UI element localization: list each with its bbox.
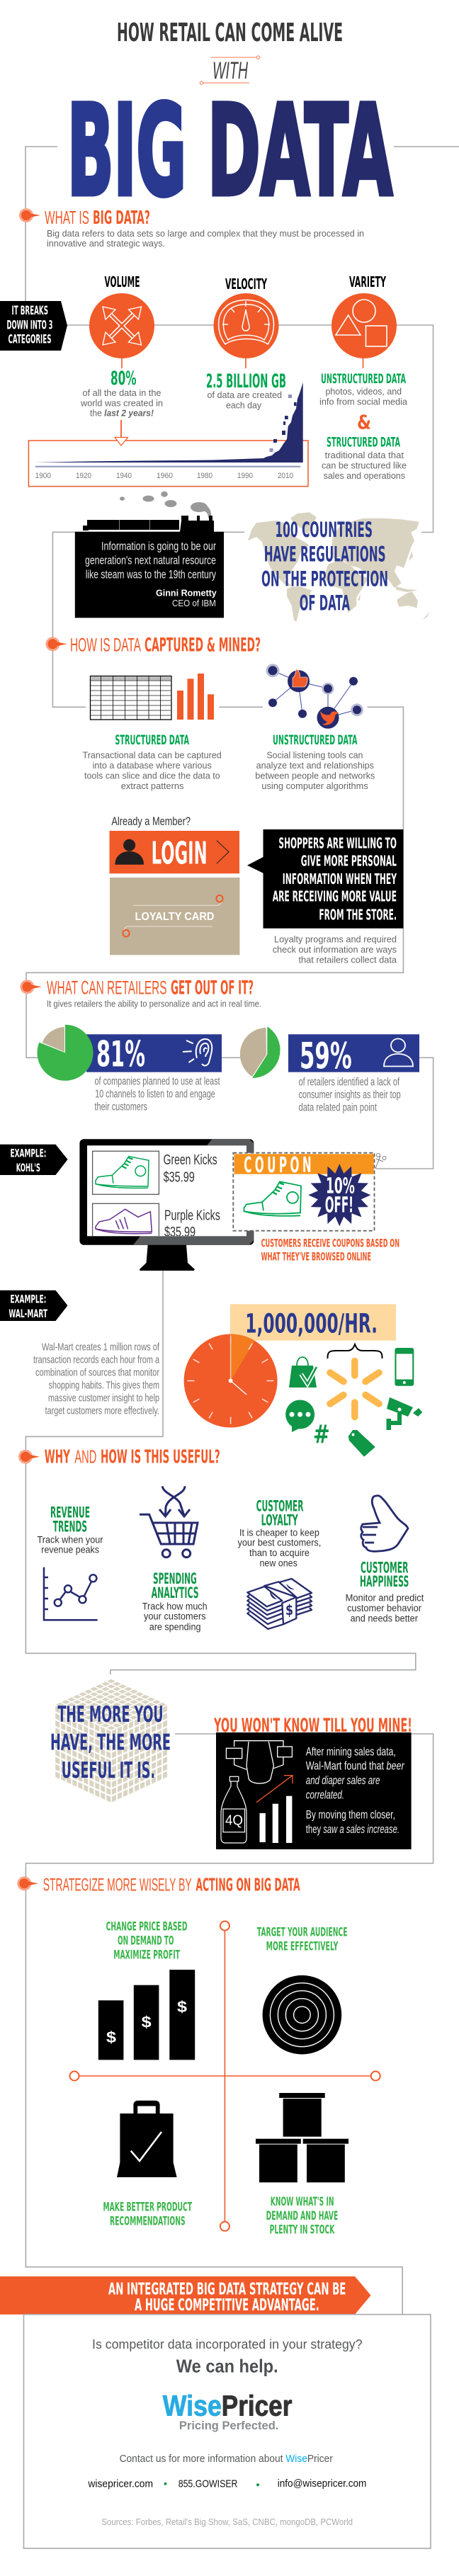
icon: line chart bbox=[44, 1567, 98, 1620]
icon: data cube bbox=[55, 1679, 167, 1803]
quadrant: product recommendations: RECOMMENDATIONS bbox=[110, 2215, 186, 2229]
ampersand: & bbox=[357, 411, 371, 434]
benefit: revenue trends: REVENUE bbox=[50, 1504, 90, 1521]
quadrant cross bbox=[69, 1921, 380, 2231]
icon: social network bbox=[266, 664, 363, 729]
icon: scissors bbox=[375, 1153, 386, 1169]
stat description: the last 2 years! bbox=[90, 408, 154, 419]
structured data definition: can be structured like bbox=[322, 460, 407, 471]
section heading: why and how is this useful: HOW IS THIS USEFUL? bbox=[101, 1447, 220, 1468]
cube callout: THE MORE YOU bbox=[57, 1702, 164, 1727]
icon: walmart spark bbox=[330, 1361, 379, 1417]
stat panel: 59%: data related pain point bbox=[299, 1102, 377, 1114]
tag: example wal-mart: WAL-MART bbox=[8, 1307, 47, 1320]
infographic canvas: ACTING ON BIG DATA bbox=[196, 1874, 300, 1895]
world map callout: OF DATA bbox=[300, 591, 350, 615]
icon: hashtag: # bbox=[313, 1420, 330, 1449]
banner: competitive advantage: A HUGE COMPETITIVE ADVANTAGE. bbox=[135, 2295, 319, 2315]
tag: example kohl's bbox=[0, 1145, 68, 1175]
chart: data growth 1900-2010: 1960 bbox=[157, 472, 173, 480]
icon: speedometer bbox=[219, 300, 273, 344]
product: green kicks bbox=[93, 1151, 217, 1194]
chart: data growth 1900-2010: 1980 bbox=[197, 472, 212, 480]
contact details: 855.GOWISER bbox=[178, 2479, 238, 2490]
quadrant: stock: KNOW WHAT'S IN bbox=[271, 2195, 334, 2209]
monitor with shoes bbox=[79, 1139, 254, 1271]
coupon bbox=[233, 1152, 386, 1231]
panel: beer and diapers: and diaper sales are bbox=[306, 1774, 380, 1787]
logo: wisepricer: Pricing Perfected. bbox=[179, 2419, 278, 2432]
benefit: spending analytics: your customers bbox=[144, 1611, 206, 1622]
definition text: innovative and strategic ways. bbox=[47, 238, 165, 249]
icon: thumbs up bbox=[361, 1496, 408, 1551]
stat panel: 59%: of retailers identified a lack of bbox=[299, 1077, 400, 1089]
benefit: customer happiness: HAPPINESS bbox=[360, 1573, 409, 1590]
section heading: why and how is this useful: AND bbox=[74, 1446, 96, 1468]
stat description bbox=[207, 390, 282, 411]
chart: data growth 1900-2010: 1940 bbox=[116, 472, 132, 480]
text: unstructured data: Social listening tools can bbox=[266, 750, 363, 761]
text: wal-mart description: combination of sources that monitor bbox=[35, 1367, 159, 1379]
login button: LOGIN bbox=[152, 835, 208, 871]
icon: person bbox=[384, 1038, 413, 1067]
panel: beer and diapers: After mining sales data, bbox=[306, 1744, 396, 1758]
icon: stack of money bbox=[247, 1579, 312, 1629]
icon: speech bubble bbox=[285, 1400, 314, 1432]
login button bbox=[109, 831, 239, 873]
benefit: customer happiness: Monitor and predict bbox=[346, 1593, 424, 1604]
icon: price bars: $ bbox=[142, 2013, 152, 2031]
tag: example kohl's: KOHL'S bbox=[16, 1161, 40, 1174]
tag: example kohl's: EXAMPLE: bbox=[10, 1146, 46, 1159]
panel: beer and diapers: they saw a sales increase. bbox=[306, 1822, 400, 1836]
discount starburst: OFF! bbox=[325, 1193, 353, 1218]
icon: steam train bbox=[83, 492, 214, 532]
logo: wisepricer bbox=[163, 2390, 292, 2432]
text: loyalty programs bbox=[273, 934, 397, 965]
text: structured data: tools can slice and dice the data to bbox=[84, 770, 220, 781]
discount starburst bbox=[308, 1164, 370, 1226]
icon: rising bars bbox=[259, 1796, 292, 1843]
stat: one million per hour: 1,000,000/HR. bbox=[245, 1309, 378, 1339]
panel: quote: Information is going to be our bbox=[101, 540, 216, 553]
unstructured data definition: photos, videos, and bbox=[326, 386, 402, 397]
cube callout: USEFUL IT IS. bbox=[62, 1758, 155, 1783]
text: wal-mart description: target customers more effectively. bbox=[45, 1405, 159, 1417]
coupon: COUPON bbox=[244, 1152, 314, 1178]
icon: table and bars bbox=[91, 674, 214, 720]
quadrant: stock: PLENTY IN STOCK bbox=[270, 2223, 335, 2237]
quadrant: change price: MAXIMIZE PROFIT bbox=[113, 1948, 180, 1963]
benefit: spending analytics bbox=[140, 1486, 208, 1632]
quadrant: stock bbox=[256, 2093, 348, 2237]
section heading: what is big data bbox=[19, 207, 150, 229]
we can help: We can help. bbox=[176, 2355, 278, 2376]
contact details: wisepricer.com bbox=[87, 2479, 153, 2490]
text: wal-mart description bbox=[33, 1341, 160, 1417]
icon: target bbox=[263, 1975, 341, 2054]
icon: security camera bbox=[387, 1397, 422, 1430]
stat description: world was created in bbox=[80, 397, 163, 408]
stat description: of data are created bbox=[207, 390, 282, 400]
panel: beer and diapers: By moving them closer, bbox=[306, 1808, 395, 1822]
icon: shopping bag with check bbox=[289, 1357, 317, 1388]
stat panel: 59% bbox=[240, 1026, 419, 1114]
column: volume: VOLUME bbox=[105, 273, 140, 290]
icon: price bars: $ bbox=[106, 2029, 116, 2046]
panel: beer and diapers bbox=[216, 1732, 412, 1849]
section heading: how is data captured and mined: CAPTURED & MINED? bbox=[144, 634, 261, 656]
chart: data growth 1900-2010: 1990 bbox=[237, 472, 253, 480]
benefit: customer loyalty: than to acquire bbox=[249, 1548, 310, 1558]
contact line: Contact us for more information about WisePricer bbox=[120, 2453, 333, 2465]
quadrant: stock: DEMAND AND HAVE bbox=[266, 2209, 338, 2223]
stat panel: 81%: of companies planned to use at least bbox=[95, 1076, 220, 1088]
icon: clock bbox=[184, 1334, 278, 1428]
icon: green shoe bbox=[244, 1181, 301, 1216]
text: structured data bbox=[82, 732, 222, 791]
tag: it breaks down into 3 categories: IT BREAKS bbox=[11, 304, 48, 317]
stat description: each day bbox=[226, 400, 261, 411]
product: green kicks: $35.99 bbox=[164, 1169, 195, 1185]
arrow to chart bbox=[115, 420, 128, 446]
section heading: how is data captured and mined bbox=[45, 634, 261, 656]
subtitle: with: WITH bbox=[212, 57, 248, 84]
icon: smartphone bbox=[395, 1348, 414, 1386]
stat panel: 81%: 10 channels to listen to and engage bbox=[95, 1088, 215, 1100]
intro text: It gives retailers the ability to personalize and act in real time. bbox=[47, 999, 261, 1009]
structured data definition: sales and operations bbox=[324, 470, 405, 481]
panel: beer and diapers: Wal-Mart found that beer bbox=[306, 1759, 405, 1773]
pie chart: 59% bbox=[240, 1026, 280, 1078]
chart: data growth 1900-2010: 1900 bbox=[35, 472, 51, 480]
text: structured data: into a database where various bbox=[93, 760, 212, 771]
section heading: strategize more wisely: STRATEGIZE MORE WISELY BY bbox=[43, 1875, 192, 1895]
definition text bbox=[47, 228, 364, 249]
tag: example wal-mart bbox=[0, 1290, 68, 1321]
icon: bag with check bbox=[117, 2101, 177, 2177]
benefit: spending analytics: Track how much bbox=[142, 1601, 208, 1611]
panel: quote: like steam was to the 19th century bbox=[86, 568, 216, 581]
product: purple kicks: $35.99 bbox=[164, 1225, 196, 1240]
benefit: spending analytics: SPENDING bbox=[153, 1570, 197, 1587]
coupon caption bbox=[261, 1237, 400, 1263]
benefit: revenue trends: TRENDS bbox=[53, 1518, 87, 1535]
stat panel: 81%: 81% bbox=[96, 1034, 145, 1075]
column: variety: VARIETY bbox=[349, 273, 386, 290]
icon: price bars: $ bbox=[177, 1998, 187, 2016]
logo: wisepricer: Wise bbox=[163, 2390, 222, 2422]
tag: it breaks down into 3 categories: CATEGORIES bbox=[8, 333, 51, 346]
tag: it breaks down into 3 categories: DOWN INTO 3 bbox=[7, 318, 52, 331]
icon: price tag bbox=[348, 1430, 375, 1457]
text: wal-mart description: massive customer insight to help bbox=[48, 1392, 159, 1405]
section heading: how is data captured and mined: HOW IS DATA bbox=[70, 634, 141, 655]
stat description bbox=[80, 387, 163, 419]
question: Is competitor data incorporated in your strategy? bbox=[92, 2337, 363, 2351]
definition text: Big data refers to data sets so large and complex that they must be processed in bbox=[47, 228, 364, 239]
quadrant: target audience: MORE EFFECTIVELY bbox=[266, 1939, 339, 1953]
infographic canvas: 2.5 BILLION GB bbox=[206, 370, 286, 392]
benefit: customer loyalty bbox=[238, 1497, 321, 1629]
icon: curly brace bbox=[327, 1344, 382, 1358]
icon: price bars bbox=[98, 1970, 195, 2060]
chart: data growth 1900-2010: 2010 bbox=[278, 472, 293, 480]
icon: shopping cart bbox=[140, 1486, 198, 1557]
icon: rising arrow bbox=[256, 1776, 293, 1803]
text: loyalty programs: Loyalty programs and required bbox=[274, 934, 397, 945]
text: structured data: extract patterns bbox=[121, 781, 184, 791]
text: unstructured data bbox=[255, 732, 375, 791]
text: wal-mart description: shopping habits. This gives them bbox=[49, 1380, 159, 1392]
icon: expanding arrows bbox=[103, 307, 142, 345]
logo: wisepricer: Pricer bbox=[222, 2390, 292, 2422]
panel: quote bbox=[75, 532, 224, 618]
benefit: customer loyalty: It is cheaper to keep bbox=[239, 1527, 319, 1538]
icon: stack of money: $ bbox=[285, 1601, 293, 1618]
column: variety bbox=[319, 273, 408, 481]
discount starburst: 10% bbox=[326, 1174, 355, 1198]
stat description: of all the data in the bbox=[82, 387, 162, 398]
pie chart: 81% bbox=[38, 1025, 94, 1081]
benefit: customer happiness: and needs better bbox=[351, 1613, 418, 1623]
text: loyalty programs: that retailers collect data bbox=[299, 954, 397, 965]
cube callout: HAVE, THE MORE bbox=[50, 1730, 171, 1756]
icon: diaper bbox=[226, 1741, 292, 1783]
text: unstructured data: using computer algorithms bbox=[261, 781, 368, 791]
stat panel: 81% bbox=[38, 1025, 222, 1113]
icon: ear bbox=[183, 1039, 212, 1065]
icon: shapes bbox=[336, 300, 387, 346]
subtitle: with bbox=[200, 56, 260, 84]
infographic canvas: GET OUT OF IT? bbox=[171, 977, 254, 999]
world map callout bbox=[248, 512, 430, 622]
icon: stacked boxes bbox=[256, 2093, 348, 2182]
benefit: revenue trends: Track when your bbox=[37, 1534, 103, 1545]
quadrant: change price bbox=[98, 1920, 195, 2060]
contact details bbox=[87, 2478, 366, 2490]
main heading: big data: BIG bbox=[67, 79, 186, 224]
product: purple kicks: Purple Kicks bbox=[164, 1208, 220, 1223]
callout: shoppers willing bbox=[247, 829, 403, 929]
text: unstructured data: UNSTRUCTURED DATA bbox=[273, 732, 358, 748]
structured data definition: traditional data that bbox=[325, 450, 404, 460]
benefit: customer happiness: customer behavior bbox=[347, 1603, 421, 1613]
benefit: customer loyalty: CUSTOMER bbox=[256, 1497, 303, 1514]
label: already a member: Already a Member? bbox=[111, 815, 191, 828]
stat panel: 59%: consumer insights as their top bbox=[299, 1089, 401, 1101]
icon: beer bottle: 4Q bbox=[225, 1813, 243, 1829]
text: wal-mart description: transaction records each hour from a bbox=[33, 1354, 159, 1366]
section heading: why and how is this useful bbox=[18, 1446, 220, 1468]
stat panel: 81%: their customers bbox=[95, 1101, 147, 1113]
panel: beer and diapers: correlated. bbox=[306, 1788, 344, 1801]
tag: it breaks down into 3 categories bbox=[0, 301, 67, 351]
icon: world map bbox=[248, 512, 430, 622]
loyalty card bbox=[110, 878, 239, 955]
text: unstructured data: between people and networks bbox=[255, 770, 375, 781]
column: velocity: VELOCITY bbox=[225, 276, 267, 293]
quadrant: change price: CHANGE PRICE BASED bbox=[106, 1920, 187, 1934]
product: purple kicks bbox=[93, 1203, 220, 1240]
column: volume bbox=[80, 273, 163, 419]
benefit: revenue trends bbox=[37, 1504, 103, 1620]
stat: one million per hour bbox=[230, 1304, 396, 1341]
text: unstructured data: analyze text and relationships bbox=[256, 760, 374, 771]
benefit: spending analytics: ANALYTICS bbox=[152, 1584, 199, 1601]
text: structured data: Transactional data can be captured bbox=[82, 750, 222, 761]
benefit: customer loyalty: LOYALTY bbox=[261, 1511, 298, 1528]
benefit: customer happiness: CUSTOMER bbox=[361, 1560, 408, 1577]
stat: 80%: 80% bbox=[110, 368, 136, 390]
benefit: revenue trends: revenue peaks bbox=[41, 1545, 99, 1555]
text: wal-mart description: Wal-Mart creates 1 million rows of bbox=[42, 1341, 160, 1354]
quadrant: target audience bbox=[257, 1925, 347, 2054]
column: velocity bbox=[206, 276, 286, 411]
benefit: customer loyalty: new ones bbox=[259, 1557, 298, 1568]
section heading: why and how is this useful: WHY bbox=[45, 1447, 71, 1468]
benefit: spending analytics: are spending bbox=[149, 1621, 201, 1632]
chart: data growth 1900-2010: 1920 bbox=[76, 472, 91, 480]
icon: beer bottle bbox=[221, 1776, 246, 1843]
panel: quote: Ginni Rometty bbox=[156, 588, 217, 598]
quadrant: target audience: TARGET YOUR AUDIENCE bbox=[257, 1925, 347, 1939]
benefit: customer loyalty: your best customers, bbox=[238, 1538, 321, 1548]
section heading: what is big data: WHAT IS bbox=[45, 207, 89, 228]
structured data definition bbox=[322, 435, 407, 481]
product: green kicks: Green Kicks bbox=[164, 1152, 217, 1168]
text: structured data: STRUCTURED DATA bbox=[115, 732, 189, 748]
cube callout bbox=[50, 1679, 171, 1803]
section heading: what is big data: BIG DATA? bbox=[93, 208, 150, 229]
section heading: what can retailers get out of it: WHAT CAN RETAILERS bbox=[47, 977, 167, 998]
unstructured data definition bbox=[319, 371, 408, 407]
world map callout: 100 COUNTRIES bbox=[275, 518, 373, 542]
stat panel: 59%: 59% bbox=[300, 1035, 352, 1077]
quadrant: change price: ON DEMAND TO bbox=[118, 1934, 174, 1948]
loyalty card: LOYALTY CARD bbox=[135, 911, 214, 923]
contact details: info@wisepricer.com bbox=[278, 2478, 366, 2490]
text: loyalty programs: check out information are ways bbox=[273, 944, 397, 955]
panel: quote: generation's next natural resource bbox=[85, 554, 216, 567]
chart: data growth 1900-2010 bbox=[28, 382, 308, 487]
quadrant: product recommendations bbox=[103, 2101, 192, 2229]
sources: Sources: Forbes, Retail's Big Show, SaS, CNBC, mongoDB, PCWorld bbox=[101, 2517, 353, 2527]
unstructured data definition: info from social media bbox=[319, 397, 408, 407]
benefit: customer happiness bbox=[346, 1496, 424, 1623]
panel: call to action bbox=[24, 2315, 431, 2548]
tag: example wal-mart: EXAMPLE: bbox=[10, 1292, 46, 1305]
quadrant: product recommendations: MAKE BETTER PRODUCT bbox=[103, 2201, 192, 2215]
banner: competitive advantage bbox=[0, 2276, 371, 2315]
panel: quote: CEO of IBM bbox=[172, 598, 216, 608]
